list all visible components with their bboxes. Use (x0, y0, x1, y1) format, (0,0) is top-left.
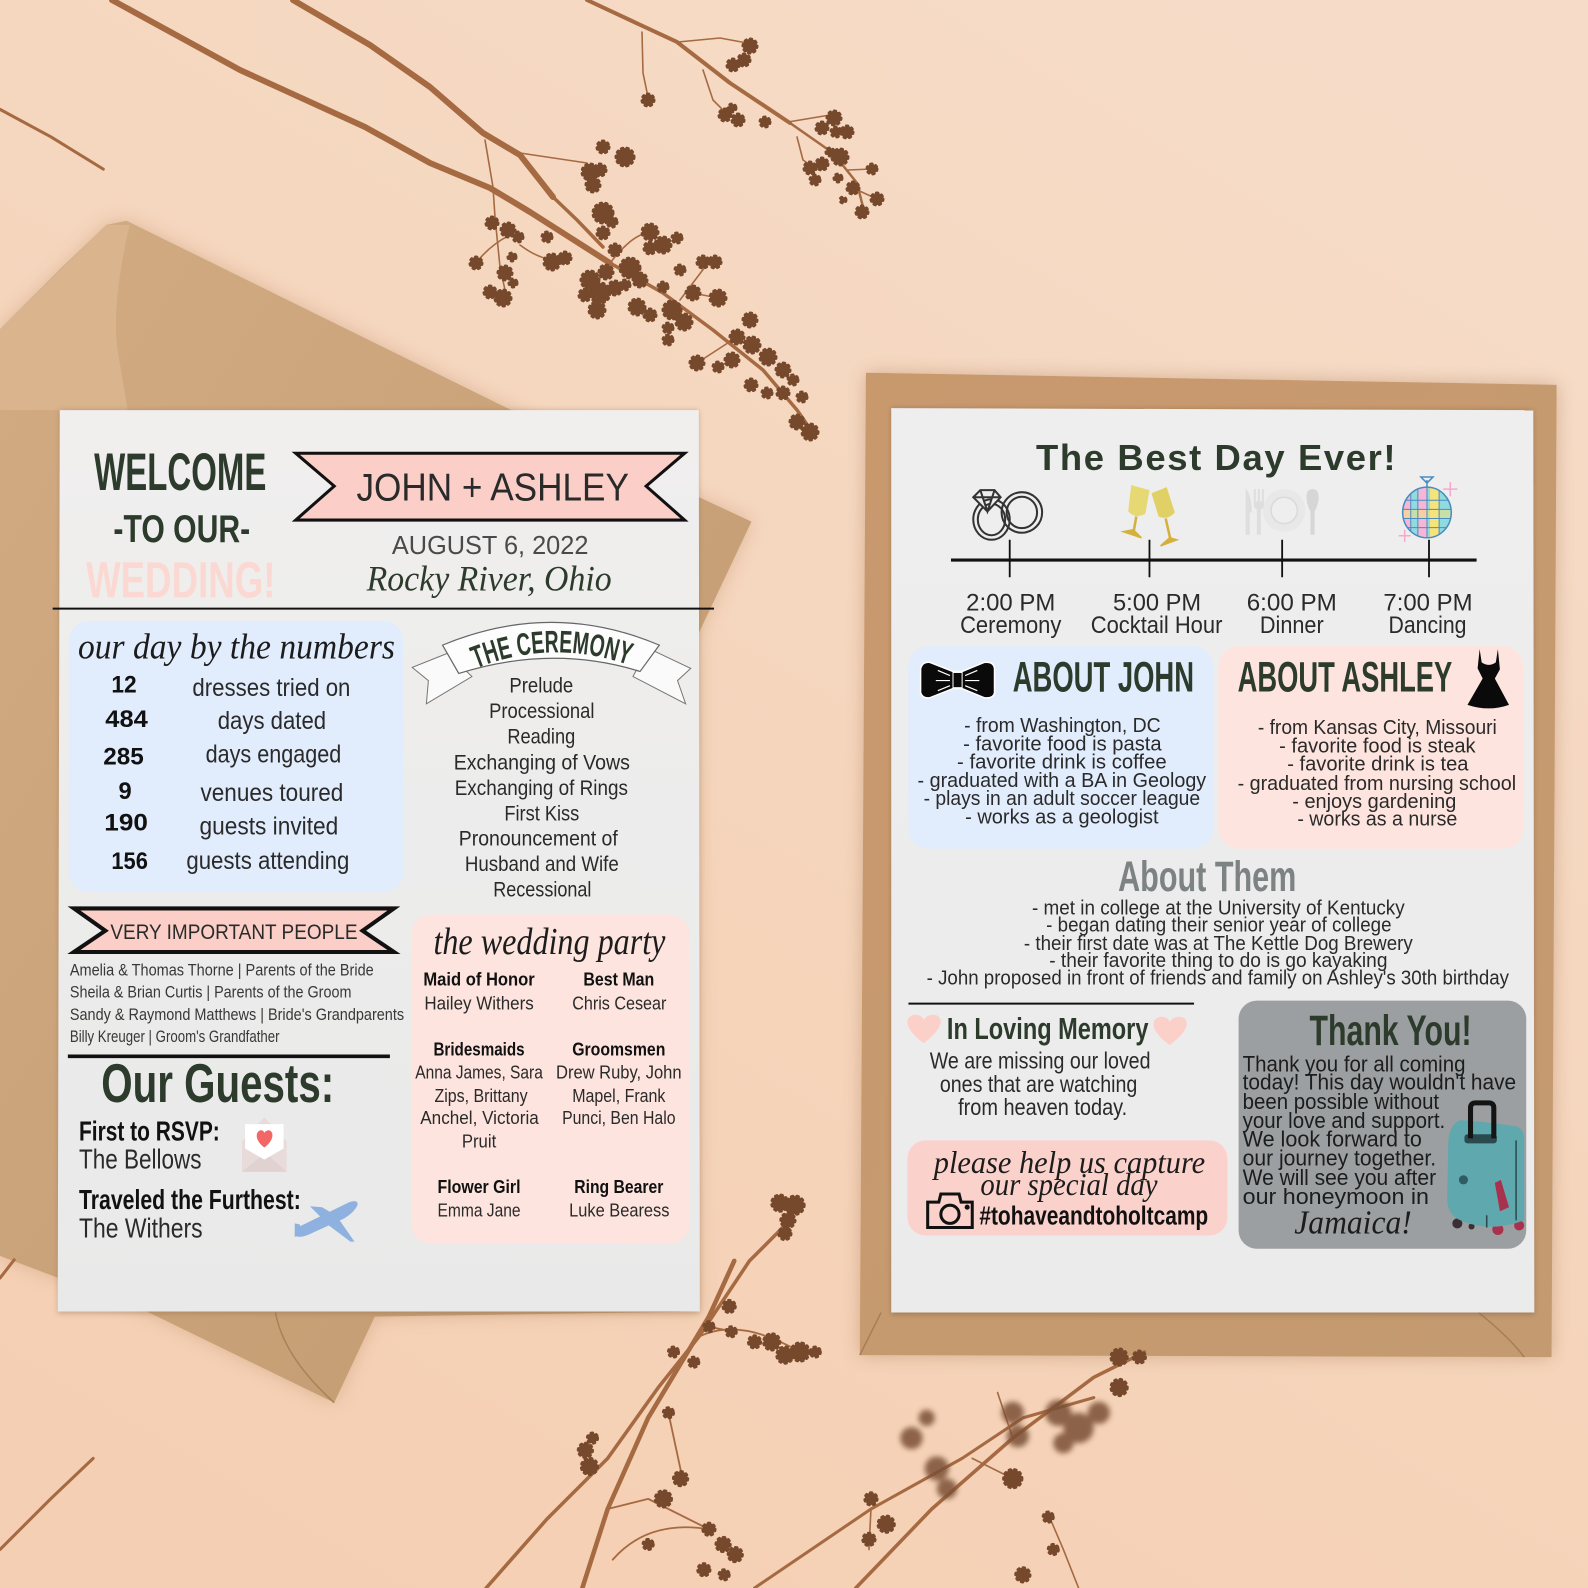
panel: our day by the numbers: 190 (104, 809, 148, 836)
panel: about john: - graduated with a BA in Geology (918, 769, 1207, 792)
banner: very important people: VERY IMPORTANT PEOPLE (110, 920, 358, 944)
panel: thank you: We will see you after (1243, 1165, 1436, 1190)
banner: names: JOHN + ASHLEY (356, 466, 629, 509)
location: Rocky River, Ohio (366, 558, 612, 598)
panel: the wedding party: Emma Jane (438, 1199, 521, 1220)
panel: thank you: our journey together. (1243, 1146, 1436, 1171)
panel: photo hashtag: our special day (980, 1167, 1158, 1202)
small corner twigs (0, 109, 103, 1550)
panel: about john: - plays in an adult soccer league (924, 787, 1200, 810)
ceremony order list: Processional (489, 699, 594, 723)
timeline: Ceremony (960, 612, 1062, 639)
panel: our day by the numbers: days engaged (206, 741, 341, 769)
ribbon: the ceremony: THE CEREMONY (468, 630, 635, 667)
heading: welcome to our wedding: WEDDING! (86, 552, 275, 609)
in loving memory (907, 1012, 1187, 1120)
icon: bow tie (921, 662, 995, 698)
icon: camera (928, 1194, 972, 1227)
bottom dried branches (486, 1195, 1145, 1588)
panel: our day by the numbers: our day by the numbers (78, 626, 395, 666)
panel: the wedding party: Pruit (462, 1130, 497, 1151)
panel: the wedding party (411, 915, 690, 1244)
panel: our day by the numbers: 9 (118, 778, 132, 805)
panel: about john: - works as a geologist (965, 805, 1159, 828)
guest facts: First to RSVP: (79, 1115, 220, 1146)
panel: the wedding party: Maid of Honor (423, 968, 535, 989)
icon: suitcase (1447, 1103, 1524, 1235)
left kraft envelope (0, 221, 751, 1403)
important people list: Amelia & Thomas Thorne | Parents of the Bride (70, 961, 374, 979)
panel: thank you: Thank You! (1309, 1007, 1472, 1055)
top dried branches (112, 0, 883, 440)
panel: about john: - favorite food is pasta (963, 732, 1162, 755)
panel: photo hashtag: #tohaveandtoholtcamp (979, 1200, 1208, 1230)
timeline (951, 540, 1477, 639)
ceremony order list: First Kiss (504, 801, 579, 825)
heading: about them: About Them (1118, 853, 1296, 901)
heading: the best day ever: The Best Day Ever! (1036, 437, 1396, 478)
timeline: Dinner (1260, 612, 1324, 639)
icon: black dress (1467, 649, 1509, 708)
ceremony order list: Prelude (509, 674, 573, 698)
icon: wedding rings (973, 490, 1042, 540)
panel: about john: - from Washington, DC (964, 714, 1161, 737)
banner: names (296, 453, 685, 520)
panel: our day by the numbers: days dated (218, 707, 326, 735)
panel: the wedding party: Luke Bearess (569, 1199, 669, 1220)
panel: thank you: today! This day wouldn't have (1243, 1070, 1516, 1095)
panel: the wedding party: Anna James, Sara (415, 1062, 543, 1083)
about them list: - their favorite thing to do is go kayaking (1049, 950, 1387, 972)
panel: about ashley: - enjoys gardening (1292, 790, 1456, 813)
ceremony order list: Husband and Wife (465, 852, 619, 876)
about them list (927, 898, 1510, 989)
panel: about ashley: - graduated from nursing school (1238, 772, 1516, 795)
in loving memory: In Loving Memory (947, 1012, 1149, 1046)
timeline: 6:00 PM (1247, 590, 1337, 617)
panel: thank you: We look forward to (1243, 1126, 1422, 1151)
panel: our day by the numbers: 285 (103, 744, 144, 771)
panel: the wedding party: Chris Cesear (572, 993, 666, 1014)
panel: photo hashtag: please help us capture (932, 1145, 1205, 1180)
panel: about ashley: - favorite drink is tea (1287, 753, 1469, 776)
panel: thank you (1239, 1001, 1526, 1249)
icon: place setting (1246, 488, 1319, 535)
timeline: 5:00 PM (1113, 590, 1201, 617)
timeline: 2:00 PM (966, 590, 1055, 617)
panel: our day by the numbers: venues toured (201, 779, 343, 807)
panel: about john: - favorite drink is coffee (957, 751, 1167, 774)
panel: the wedding party: Zips, Brittany (434, 1085, 528, 1106)
panel: about ashley: - works as a nurse (1297, 807, 1457, 830)
date: AUGUST 6, 2022 (392, 530, 588, 560)
panel: thank you: Jamaica! (1294, 1205, 1412, 1242)
panel: about ashley: ABOUT ASHLEY (1238, 654, 1452, 702)
panel: our day by the numbers: guests invited (200, 813, 338, 841)
panel: our day by the numbers: 484 (105, 706, 148, 733)
panel: thank you: your love and support. (1243, 1108, 1445, 1133)
panel: the wedding party: Best Man (583, 968, 654, 989)
panel: the wedding party: Drew Ruby, John (556, 1062, 682, 1083)
panel: the wedding party: Groomsmen (572, 1038, 665, 1059)
panel: about john: ABOUT JOHN (1013, 654, 1194, 702)
timeline: Dancing (1388, 612, 1466, 639)
panel: the wedding party: Bridesmaids (433, 1038, 525, 1059)
panel: the wedding party: Hailey Withers (424, 993, 534, 1014)
panel: right card (891, 408, 1534, 1313)
panel: the wedding party: Mapel, Frank (572, 1085, 666, 1106)
ceremony order list: Pronouncement of (459, 827, 618, 851)
panel: thank you: been possible without (1243, 1089, 1439, 1114)
panel: the wedding party: Flower Girl (438, 1176, 521, 1197)
about them list: - began dating their senior year of college (1046, 915, 1392, 937)
ceremony order list (454, 674, 630, 901)
important people list: Billy Kreuger | Groom's Grandfather (70, 1028, 280, 1046)
timeline: Cocktail Hour (1091, 612, 1222, 639)
important people list: Sheila & Brian Curtis | Parents of the Groom (70, 984, 351, 1002)
right kraft envelope (860, 373, 1557, 1357)
heading: welcome to our wedding: WELCOME (94, 443, 266, 502)
panel: photo hashtag (907, 1140, 1227, 1236)
important people list: Sandy & Raymond Matthews | Bride's Grandparents (70, 1006, 404, 1024)
panel: our day by the numbers: dresses tried on (192, 674, 350, 702)
about them list: - their first date was at The Kettle Dog Brewery (1024, 933, 1414, 955)
in loving memory: We are missing our loved (930, 1047, 1150, 1073)
in loving memory: from heaven today. (958, 1094, 1127, 1120)
icon: airplane (295, 1201, 358, 1242)
icon: love letter (242, 1117, 287, 1172)
card shadows (58, 408, 1534, 1315)
ceremony order list: Exchanging of Rings (455, 776, 628, 800)
ceremony order list: Recessional (493, 877, 591, 901)
banner: very important people (74, 908, 394, 952)
panel: our day by the numbers: 12 (111, 672, 137, 699)
heading: welcome to our wedding: -TO OUR- (113, 508, 250, 551)
guest facts: The Bellows (79, 1144, 202, 1175)
about them list: - John proposed in front of friends and family on Ashley's 30th birthday (927, 967, 1510, 989)
panel: thank you: our honeymoon in (1243, 1184, 1429, 1209)
panel: about john (908, 646, 1213, 849)
panel: left card (52, 410, 714, 1312)
in loving memory: ones that are watching (940, 1071, 1137, 1097)
panel: about ashley: - favorite food is steak (1279, 734, 1476, 757)
icon: champagne glasses (1123, 485, 1177, 546)
panel: the wedding party: Anchel, Victoria (420, 1107, 539, 1128)
guest facts: Traveled the Furthest: (79, 1184, 301, 1215)
heading: our guests: Our Guests: (101, 1052, 334, 1114)
panel: our day by the numbers (69, 621, 403, 892)
panel: thank you: Thank you for all coming (1243, 1051, 1465, 1076)
panel: about ashley: - from Kansas City, Missouri (1258, 716, 1497, 739)
panel: about ashley (1218, 646, 1523, 849)
guest facts: The Withers (79, 1213, 203, 1244)
guest facts (79, 1115, 301, 1244)
ribbon: the ceremony (411, 622, 692, 705)
ceremony order list: Reading (507, 724, 575, 748)
timeline: 7:00 PM (1383, 590, 1473, 617)
icon: disco ball (1399, 477, 1457, 542)
panel: the wedding party: the wedding party (433, 921, 666, 963)
panel: our day by the numbers: 156 (111, 848, 148, 875)
panel: the wedding party: Ring Bearer (574, 1176, 663, 1197)
about them list: - met in college at the University of Kentucky (1032, 898, 1405, 920)
ceremony order list: Exchanging of Vows (454, 751, 630, 775)
panel: our day by the numbers: guests attending (186, 847, 349, 875)
panel: the wedding party: Punci, Ben Halo (562, 1107, 676, 1128)
important people list (70, 961, 404, 1046)
heading: welcome to our wedding (86, 443, 275, 609)
